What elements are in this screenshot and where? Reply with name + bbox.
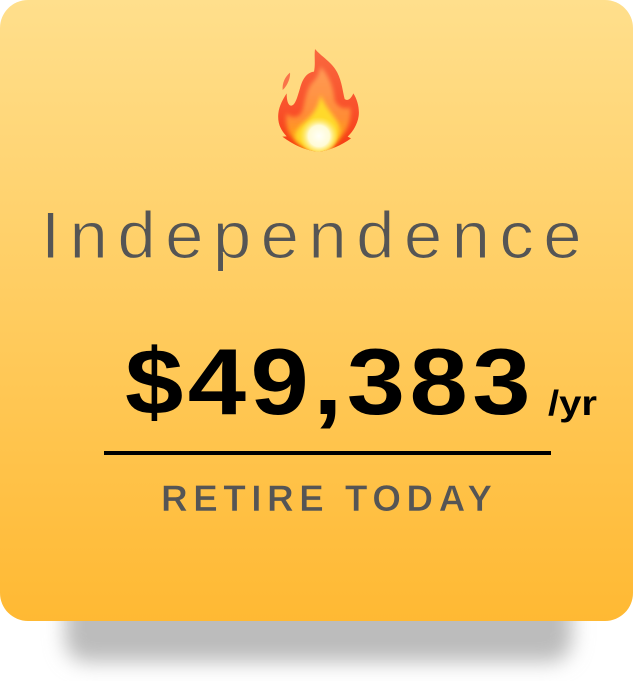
divider line [104, 451, 551, 455]
card shadow [65, 560, 572, 662]
caption: RETIRE TODAY: RETIRE TODAY [161, 478, 492, 519]
amount: $49,383: $49,383 [125, 329, 535, 434]
unit: /yr: /yr [548, 384, 597, 423]
icon: flame [278, 49, 359, 152]
heading: Independence: Independence [41, 198, 591, 272]
